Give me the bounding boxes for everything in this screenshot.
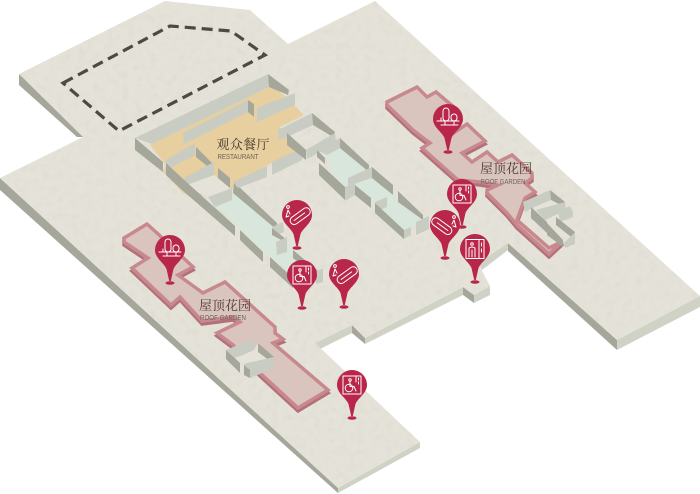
- icon: pin accessible right: [447, 179, 477, 229]
- panel: right roof garden: [387, 87, 575, 257]
- icon: pin garden right: [433, 104, 463, 154]
- heading: restaurant: RESTAURANT: [218, 152, 259, 161]
- icon: pin escalator right: [430, 210, 460, 260]
- icon: pin escalator centre: [329, 259, 359, 309]
- heading: right roof garden: ROOF GARDEN: [480, 177, 526, 186]
- restaurant floor: [150, 85, 304, 197]
- icon: pin escalator upper: [282, 200, 312, 250]
- icon: pin lift right: [460, 234, 490, 284]
- icon: pin accessible centre: [287, 260, 317, 310]
- heading: left roof garden: ROOF GARDEN: [200, 313, 246, 322]
- heading: right roof garden: 屋顶花园: [480, 161, 532, 176]
- panel: restaurant: [135, 74, 336, 288]
- icon: pin garden left: [155, 235, 185, 285]
- icon: pin accessible lower: [337, 370, 367, 420]
- heading: left roof garden: 屋顶花园: [199, 298, 251, 313]
- heading: right roof garden: [480, 161, 532, 186]
- heading: restaurant: 观众餐厅: [216, 137, 270, 152]
- room: [523, 190, 575, 248]
- room: [226, 339, 274, 378]
- heading: left roof garden: [199, 298, 251, 322]
- corridor floor: [208, 190, 318, 285]
- corridor floor: [327, 148, 423, 232]
- dashed outline area: [63, 26, 265, 131]
- panel: left roof garden: [124, 224, 328, 411]
- panel: service corridor: [317, 138, 429, 239]
- heading: restaurant: [216, 137, 270, 161]
